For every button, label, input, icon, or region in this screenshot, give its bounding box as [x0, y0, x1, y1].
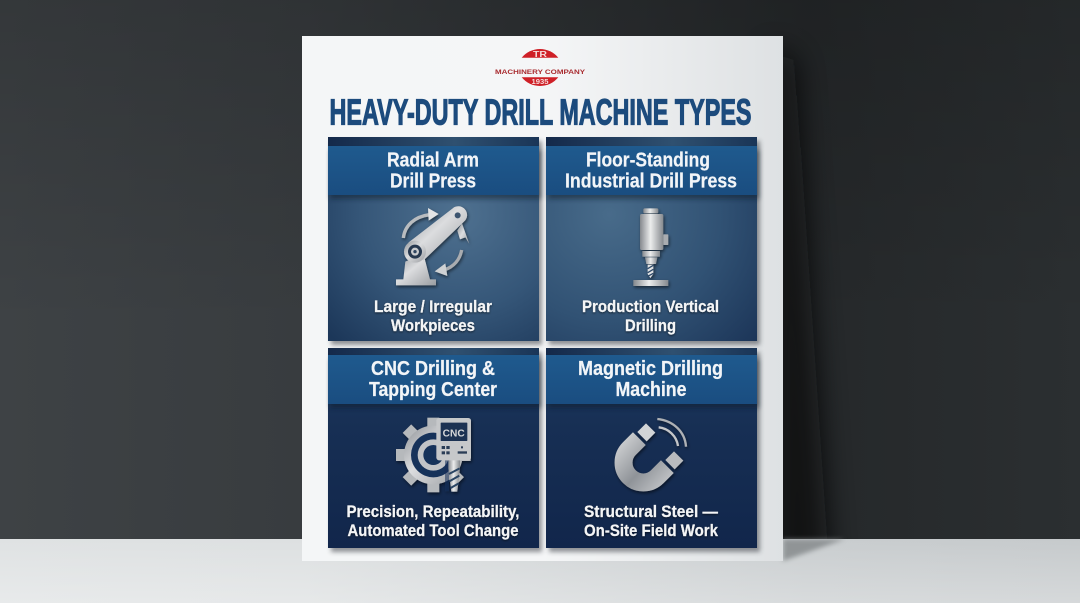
- panel: CNC Drilling & Tapping Center: [328, 348, 541, 548]
- logo: TR Machinery Company 1935: [495, 49, 586, 86]
- poster board: [302, 36, 783, 561]
- logo: TR Machinery Company 1935: 1935: [532, 79, 549, 86]
- logo: TR Machinery Company 1935: TR: [533, 50, 547, 59]
- poster shadow on floor: [783, 539, 845, 561]
- header: Magnetic Drilling Machine: [546, 355, 759, 408]
- caption: Structural Steel — On-Site Field Work: On-Site Field Work: [584, 521, 718, 540]
- icon: horseshoe magnet: [624, 419, 686, 482]
- header: Radial Arm Drill Press: Drill Press: [390, 170, 476, 192]
- caption: Structural Steel — On-Site Field Work: Structural Steel —: [584, 502, 718, 521]
- header: Magnetic Drilling Machine: Magnetic Drilling: [578, 357, 723, 380]
- caption: Production Vertical Drilling: [582, 297, 719, 335]
- header: Floor-Standing Industrial Drill Press: Floor-Standing: [586, 148, 710, 172]
- icon: CNC gear and control panel: [396, 418, 471, 492]
- icon: CNC gear and control panel: CNC: [443, 428, 465, 439]
- caption: Production Vertical Drilling: Production Vertical: [582, 297, 719, 316]
- caption: Precision, Repeatability, Automated Tool Change: Automated Tool Change: [348, 521, 518, 540]
- caption: Precision, Repeatability, Automated Tool Change: Precision, Repeatability,: [346, 502, 520, 521]
- panel shadows: [331, 141, 760, 552]
- panel: Radial Arm Drill Press: [328, 137, 541, 341]
- background: light floor: [0, 539, 1080, 603]
- icon: vertical drill: [633, 208, 668, 286]
- header: Radial Arm Drill Press: Radial Arm: [387, 148, 479, 172]
- caption: Production Vertical Drilling: Drilling: [625, 316, 676, 335]
- caption: Structural Steel — On-Site Field Work: [584, 502, 718, 540]
- poster shadow on wall: [770, 46, 830, 580]
- caption: Precision, Repeatability, Automated Tool Change: [346, 502, 520, 540]
- title: HEAVY-DUTY DRILL MACHINE TYPES: [330, 92, 752, 132]
- logo: TR Machinery Company 1935: MACHINERY COMPANY: [495, 69, 586, 76]
- panel: Floor-Standing Industrial Drill Press: [546, 137, 759, 341]
- panel: Magnetic Drilling Machine: [546, 348, 759, 548]
- icon: radial arm: [396, 206, 469, 285]
- header: Radial Arm Drill Press: [328, 146, 541, 199]
- header: CNC Drilling & Tapping Center: Tapping Center: [369, 378, 497, 401]
- header: Floor-Standing Industrial Drill Press: [546, 146, 759, 199]
- caption: Large / Irregular Workpieces: [374, 297, 492, 335]
- caption: Large / Irregular Workpieces: Workpieces: [391, 316, 475, 335]
- caption: Large / Irregular Workpieces: Large / Irregular: [374, 297, 492, 316]
- header: CNC Drilling & Tapping Center: CNC Drilling &: [371, 357, 495, 380]
- header: Floor-Standing Industrial Drill Press: Industrial Drill Press: [565, 170, 737, 192]
- header: Magnetic Drilling Machine: Machine: [616, 378, 686, 401]
- header: CNC Drilling & Tapping Center: [328, 355, 541, 408]
